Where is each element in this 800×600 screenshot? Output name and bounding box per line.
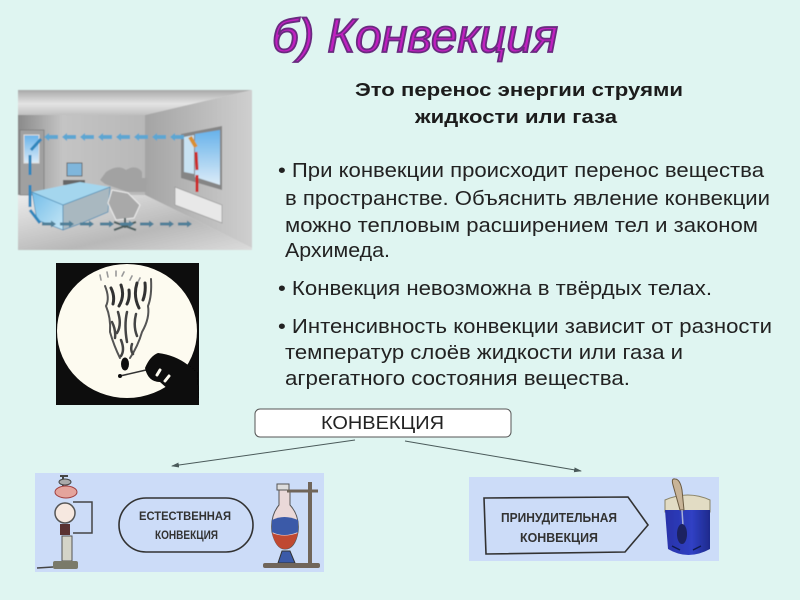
hand silhouette (145, 353, 199, 398)
label pill: natural convection (119, 498, 253, 552)
bullet 1 (278, 160, 770, 262)
bullet 3: • Интенсивность конвекции зависит от разности (278, 316, 772, 338)
bullet 1: в пространстве. Объяснить явление конвекции (285, 188, 770, 210)
label arrow: forced convection: ПРИНУДИТЕЛЬНАЯ (501, 510, 617, 525)
definition text: жидкости или газа (414, 107, 618, 127)
window (181, 126, 222, 190)
bullet 2: • Конвекция невозможна в твёрдых телах. (278, 278, 712, 300)
chair (108, 190, 140, 230)
desk (32, 182, 110, 230)
icon: beaker with blue liquid and spoon (665, 479, 710, 555)
bullet 1: • При конвекции происходит перенос вещества (278, 160, 765, 182)
panel: forced convection (469, 477, 719, 561)
image: room with convection arrows (18, 90, 252, 250)
icon: flask on stand (263, 482, 320, 568)
definition text: Это перенос энергии струями (355, 80, 683, 100)
smoke plume (100, 271, 151, 358)
definition text (355, 80, 683, 127)
computer (63, 163, 85, 185)
bullet 3: агрегатного состояния вещества. (285, 368, 630, 390)
label arrow: forced convection (484, 497, 648, 554)
label arrow: forced convection: КОНВЕКЦИЯ (520, 530, 598, 545)
door (20, 130, 44, 195)
concept box (255, 409, 511, 437)
title: б) Конвекция (272, 9, 558, 62)
sofa (100, 167, 147, 192)
image: candle flame shadow (56, 263, 199, 405)
radiator (175, 187, 222, 223)
floor arrows (42, 220, 192, 228)
top blue arrows (44, 133, 184, 141)
warm air rising (196, 152, 197, 192)
arrow to forced convection (405, 441, 581, 471)
icon: lamp apparatus (37, 476, 92, 569)
concept box: КОНВЕКЦИЯ (321, 413, 444, 433)
arrow to natural convection (172, 440, 355, 466)
panel: natural convection (35, 473, 324, 572)
matchstick (120, 370, 146, 376)
flame tip (121, 358, 129, 370)
bullet 1: можно тепловым расширением тел и законом (285, 215, 758, 237)
bullet 1: Архимеда. (285, 240, 390, 262)
label pill: natural convection: КОНВЕКЦИЯ (155, 530, 218, 542)
label pill: natural convection: ЕСТЕСТВЕННАЯ (139, 511, 231, 523)
left blue arrows (30, 139, 41, 223)
bullet 3: температур слоёв жидкости или газа и (285, 342, 683, 364)
bullet 3 (278, 316, 772, 390)
bullet list (278, 160, 772, 390)
